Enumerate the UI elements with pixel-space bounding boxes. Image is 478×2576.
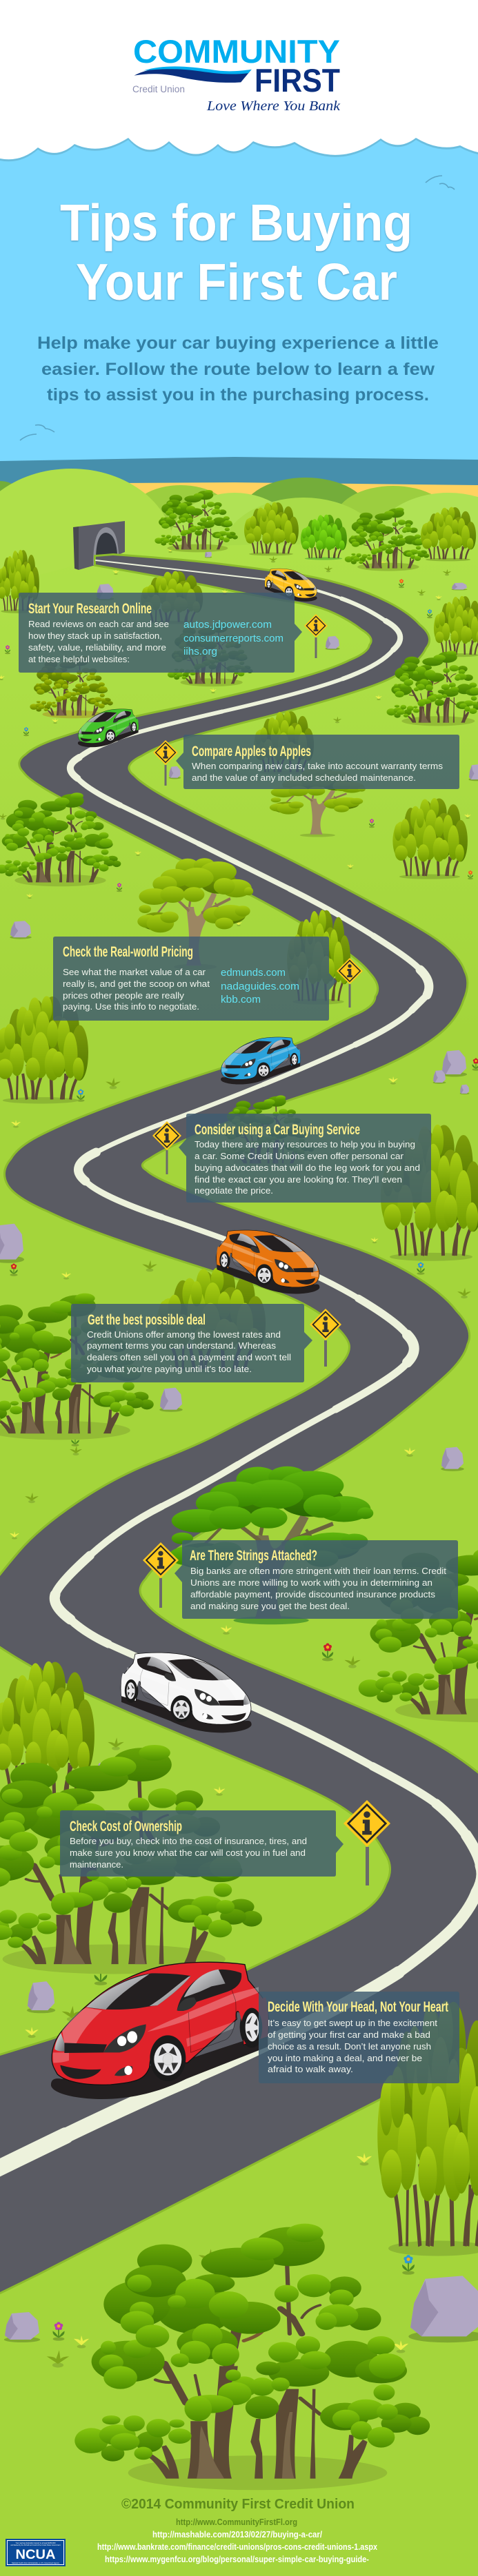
- sign 6: [143, 1542, 179, 1608]
- icon: birds bottom left: [20, 425, 54, 440]
- road: [0, 555, 478, 2295]
- NCUA badge: Your savings federally insured to at least $250,000: [15, 2542, 56, 2544]
- panel: decide with your head, not your heart: [259, 1992, 459, 2083]
- panel: consider using a car buying service: Consider using a Car Buying Service: [195, 1122, 360, 1138]
- panel: check cost of ownership: Check Cost of Ownership: [70, 1819, 182, 1834]
- rocks: [0, 550, 478, 2342]
- panel: consider using a car buying service: negotiate the price.: [195, 1185, 273, 1196]
- logo: Community First Credit Union: COMMUNITY: [133, 33, 340, 70]
- NCUA badge: and backed by the full faith and credit of the United States Government: [10, 2544, 61, 2546]
- title: [60, 194, 412, 311]
- panel: check cost of ownership: Before you buy, check into the cost of insurance, tires, and: [70, 1836, 307, 1846]
- footer: source links: http://www.bankrate.com/finance/credit-unions/pros-cons-credit-unions-1.aspx: [97, 2542, 377, 2552]
- logo: Community First Credit Union: Love Where You Bank: [206, 99, 341, 114]
- panel: check the real-world pricing: nadaguides.com: [221, 981, 299, 992]
- sign 3: [337, 958, 363, 1008]
- car: orange: [217, 1230, 319, 1294]
- tree group: lower middle: [0, 996, 478, 1440]
- panel: check the real-world pricing: paying. Use this info to negotiate.: [63, 1001, 199, 1012]
- icon: birds top right: [426, 176, 455, 190]
- panel: get the best possible deal: you what you're paying until it's too late.: [87, 1364, 252, 1374]
- panel: get the best possible deal: Credit Unions offer among the lowest rates and: [87, 1329, 281, 1340]
- sand: [0, 482, 478, 524]
- panel: decide with your head, not your heart: of getting your first car and make a bad: [268, 2030, 430, 2040]
- panel: compare apples to apples: [176, 735, 459, 789]
- panel: start your research online: at these helpful websites:: [28, 654, 130, 664]
- panel: decide with your head, not your heart: afraid to walk away.: [268, 2064, 353, 2074]
- title: Tips for Buying: [60, 194, 412, 252]
- panel: get the best possible deal: dealers often sell you on a payment and won't tell: [87, 1352, 291, 1362]
- tree group: lower: [0, 1466, 478, 2490]
- subtitle: tips to assist you in the purchasing process.: [47, 385, 429, 405]
- tree group: top row: [0, 490, 478, 657]
- NCUA badge: [6, 2539, 66, 2566]
- panel: start your research online: safety, value, reliability, and more: [28, 642, 166, 653]
- footer: source links: http://mashable.com/2013/02/27/buying-a-car/: [152, 2530, 322, 2539]
- title: Your First Car: [76, 253, 397, 311]
- sign 4: [152, 1121, 181, 1174]
- panel: compare apples to apples: Compare Apples to Apples: [192, 744, 311, 759]
- yellow sprouts: [0, 547, 471, 2353]
- panel: consider using a car buying service: Today there are many resources to help you in buying: [195, 1139, 415, 1149]
- subtitle: Help make your car buying experience a little: [37, 334, 439, 353]
- logo: Community First Credit Union: [132, 33, 341, 114]
- tree group: upper middle: [0, 622, 478, 1005]
- footer: source links: https://www.mygenfcu.org/blog/personal/super-simple-car-buying-guide-: [105, 2555, 369, 2564]
- sign 2: [153, 740, 178, 786]
- NCUA badge: NCUA: [15, 2548, 56, 2562]
- car: red: [51, 1962, 269, 2099]
- background hills: [0, 469, 478, 634]
- green grass tufts: [0, 556, 471, 2368]
- car: green: [78, 709, 139, 747]
- panel: start your research online: consumerreports.com: [183, 633, 283, 644]
- sign 7: [343, 1800, 390, 1885]
- panel: decide with your head, not your heart: you into making a deal, and never be: [268, 2053, 422, 2063]
- panel: are there strings attached: [175, 1540, 458, 1619]
- panel: are there strings attached: Unions are more willing to work with you in determining an: [190, 1577, 432, 1588]
- footer: source links: [97, 2517, 377, 2564]
- panel: are there strings attached: and making sure you get the best deal.: [190, 1601, 350, 1611]
- white header with cloud edge: [0, 0, 478, 159]
- sky background: [0, 0, 478, 476]
- NCUA badge: National Credit Union Administration, a U.S. Government Agency: [12, 2562, 60, 2564]
- subtitle: easier. Follow the route below to learn a few: [41, 360, 435, 379]
- logo: Community First Credit Union: FIRST: [255, 62, 340, 99]
- ground: [0, 544, 478, 2576]
- tunnel: [73, 521, 125, 570]
- panel: check the real-world pricing: See what the market value of a car: [63, 967, 206, 977]
- footer: source links: http://www.CommunityFirstFl.org: [176, 2517, 297, 2527]
- panel: get the best possible deal: payment terms you can understand. Whereas: [87, 1340, 277, 1351]
- panel: check the real-world pricing: [53, 937, 337, 1021]
- panel: consider using a car buying service: find the exact car you are looking for. They'll even: [195, 1174, 402, 1185]
- panel: check the real-world pricing: edmunds.com: [221, 967, 286, 979]
- panel: get the best possible deal: [71, 1304, 312, 1382]
- panel: consider using a car buying service: buying advocates that will do the leg work for you and: [195, 1163, 420, 1173]
- car: blue: [221, 1037, 301, 1085]
- flowers: [5, 579, 478, 2341]
- cloud edge shadow: [0, 0, 478, 161]
- panel: start your research online: Read reviews on each car and see: [28, 619, 169, 629]
- panel: start your research online: iihs.org: [183, 646, 217, 657]
- panel: start your research online: how they stack up in satisfaction,: [28, 631, 162, 641]
- panel: decide with your head, not your heart: choice as a result. Don’t let anyone rush: [268, 2041, 431, 2052]
- panel: are there strings attached: Are There Strings Attached?: [190, 1548, 317, 1564]
- panel: check cost of ownership: [60, 1810, 343, 1877]
- sign 5: [310, 1309, 341, 1367]
- subtitle: [37, 334, 439, 405]
- car: white: [121, 1653, 252, 1732]
- panel: start your research online: Start Your Research Online: [28, 601, 152, 617]
- panel: check the real-world pricing: prices other people are really: [63, 990, 185, 1001]
- logo: Community First Credit Union: Credit Union: [132, 84, 185, 94]
- panel: check the real-world pricing: really is, and get the scoop on what: [63, 979, 210, 989]
- panel: start your research online: autos.jdpower.com: [183, 619, 272, 631]
- panel: check the real-world pricing: kbb.com: [221, 994, 261, 1005]
- panel: check cost of ownership: maintenance.: [70, 1859, 123, 1870]
- sea: [0, 457, 478, 496]
- panel: check cost of ownership: make sure you know what the car will cost you in fuel and: [70, 1848, 306, 1858]
- panel: are there strings attached: Big banks are often more stringent with their loan terms. Credit: [190, 1566, 446, 1576]
- car: yellow: [265, 569, 317, 602]
- footer: copyright: ©2014 Community First Credit Union: [121, 2497, 355, 2512]
- panel: start your research online: [19, 593, 302, 673]
- panel: compare apples to apples: and the value of any included scheduled maintenance.: [192, 773, 416, 783]
- sign 1: [304, 614, 328, 658]
- panel: consider using a car buying service: a car. Some Credit Unions even offer personal car: [195, 1151, 404, 1161]
- trees: [0, 490, 478, 2490]
- road centre line: [0, 560, 478, 2178]
- panel: compare apples to apples: When comparing new cars, take into account warranty terms: [192, 761, 444, 771]
- panel: consider using a car buying service: [179, 1114, 431, 1203]
- panel: check the real-world pricing: Check the Real-world Pricing: [63, 944, 193, 960]
- panel: are there strings attached: affordable payment, provide discounted insurance products: [190, 1589, 436, 1599]
- panel: decide with your head, not your heart: It’s easy to get swept up in the excitement: [268, 2018, 437, 2028]
- panel: get the best possible deal: Get the best possible deal: [88, 1312, 206, 1328]
